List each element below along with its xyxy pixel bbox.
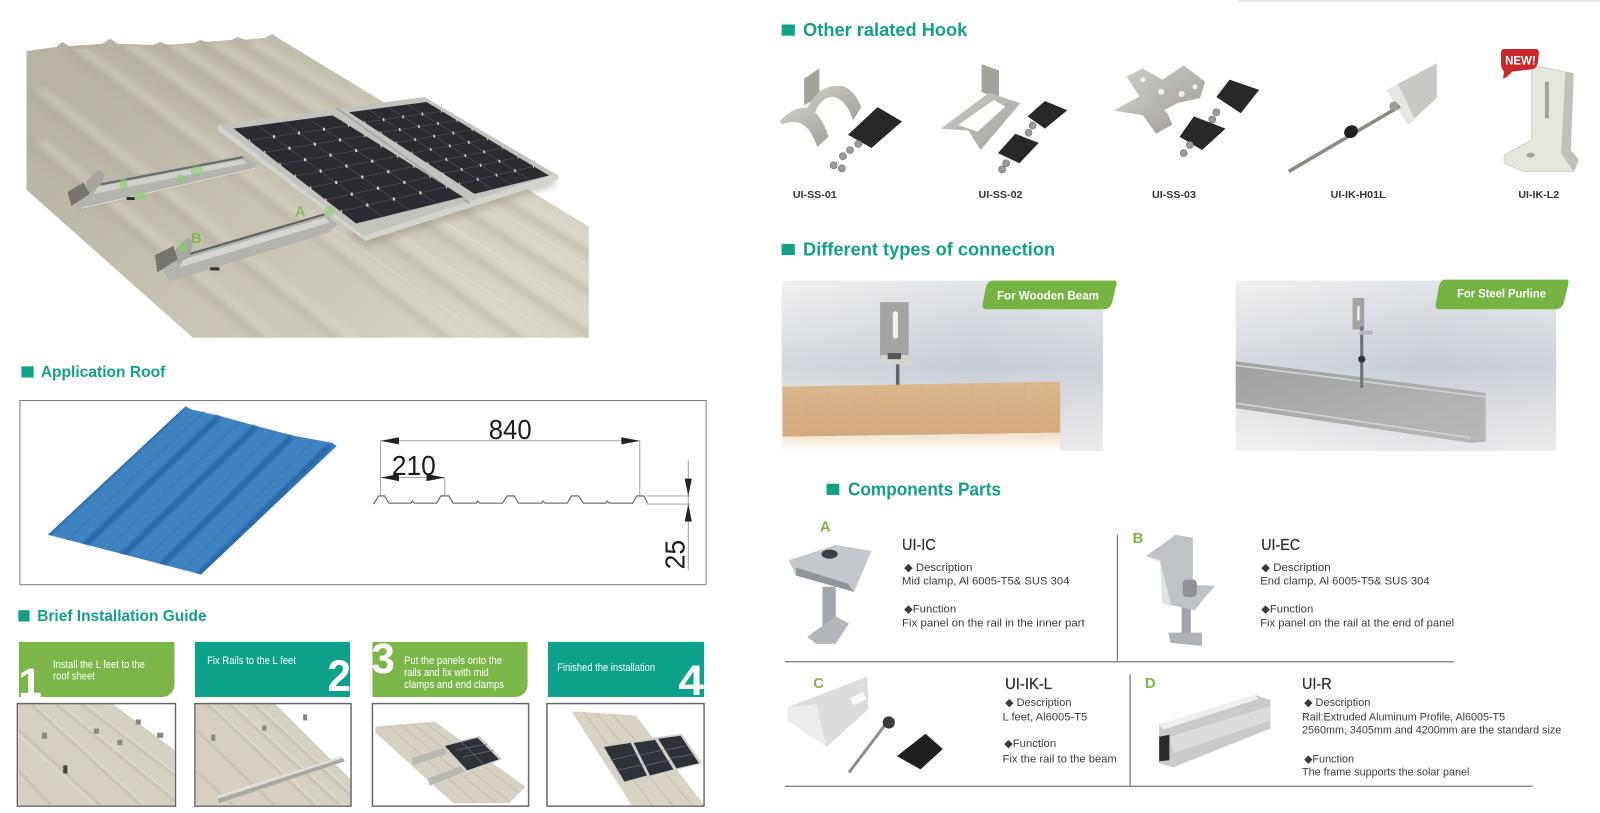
- end clamp illustration: [1146, 535, 1215, 646]
- rail illustration: [1159, 695, 1270, 767]
- component A: UI-IC: ◆Function: [904, 603, 956, 615]
- hook UI-SS-02: [941, 64, 1067, 201]
- module 2 cells: [349, 102, 549, 194]
- component D: UI-R: The frame supports the solar panel: [1302, 767, 1469, 779]
- component C: UI-IK-L: C: [813, 676, 824, 692]
- hook UI-SS-01: [780, 68, 902, 201]
- component C: UI-IK-L: ◆Function: [1004, 738, 1056, 750]
- component B: UI-EC: B: [1133, 531, 1143, 547]
- step 4 photo: [547, 704, 704, 806]
- hook UI-IK-H01L: [1289, 63, 1437, 201]
- part markers: [119, 165, 335, 252]
- label: UI-IK-L2: [1518, 190, 1559, 201]
- heading: Application Roof: Application Roof: [41, 364, 166, 381]
- component D: UI-R: ◆Function: [1304, 753, 1354, 765]
- step 3 banner: Put the panels onto the: [404, 655, 502, 667]
- wooden beam: [783, 382, 1060, 437]
- label: UI-SS-01: [793, 190, 837, 201]
- step 2 banner: Fix Rails to the L feet: [207, 655, 296, 667]
- label: UI-SS-02: [979, 190, 1022, 201]
- blue roof sheet: [45, 406, 337, 577]
- component B: UI-EC: Fix panel on the rail at the end of panel: [1260, 618, 1454, 630]
- step 3 photo: [372, 704, 531, 806]
- step 1 banner: roof sheet: [53, 671, 95, 683]
- step 2 photo: [194, 702, 352, 807]
- steel purline: [1236, 361, 1486, 443]
- tag: for steel purline: For Steel Purline: [1457, 287, 1546, 300]
- faint strip at top right: [1238, 0, 1600, 2]
- step 3 banner: clamps and end clamps: [404, 679, 504, 691]
- component B: UI-EC: ◆ Description: [1261, 562, 1331, 574]
- heading: Components Parts: Components Parts: [848, 478, 1001, 499]
- upper rail: [67, 155, 257, 211]
- tag: for wooden beam: [982, 281, 1117, 309]
- mid clamp illustration: [789, 545, 871, 644]
- part markers: B: [191, 231, 202, 247]
- component C: UI-IK-L: L feet, Al6005-T5: [1003, 711, 1087, 723]
- step 3 banner: [371, 635, 528, 697]
- solar panel array: [218, 97, 558, 241]
- dimension 840: 840: [489, 414, 532, 445]
- component B: UI-EC: UI-EC: [1261, 537, 1300, 554]
- roof profile dimension drawing: [373, 414, 692, 570]
- component D: UI-R: [1145, 676, 1561, 779]
- tag: for steel purline: [1436, 280, 1569, 309]
- component A: UI-IC: A: [820, 520, 831, 536]
- bottom rule: [785, 785, 1533, 787]
- NEW badge: NEW!: [1505, 53, 1536, 67]
- step 2 banner: 2: [328, 650, 351, 701]
- rail on roof: [216, 756, 345, 803]
- component B: UI-EC: ◆Function: [1261, 603, 1313, 615]
- component A: UI-IC: Mid clamp, Al 6005-T5& SUS 304: [902, 576, 1069, 588]
- lower rail: [155, 213, 338, 282]
- divider A/B: [1116, 535, 1118, 661]
- tag: for wooden beam: For Wooden Beam: [997, 290, 1099, 303]
- component C: UI-IK-L: ◆ Description: [1005, 697, 1071, 709]
- heading: Other ralated Hook: Other ralated Hook: [803, 19, 968, 40]
- label: UI-IK-H01L: [1331, 190, 1386, 201]
- hook UI-SS-03: [1114, 65, 1259, 201]
- component B: UI-EC: End clamp, Al 6005-T5& SUS 304: [1260, 576, 1430, 588]
- step 1 banner: 1: [18, 660, 42, 706]
- panel: application roof: [20, 401, 706, 585]
- component A: UI-IC: UI-IC: [902, 537, 936, 554]
- component C: UI-IK-L: UI-IK-L: [1005, 676, 1052, 693]
- component B: UI-EC: [1133, 531, 1454, 646]
- component A: UI-IC: ◆ Description: [904, 562, 972, 574]
- heading: Brief Installation Guide: Brief Installation Guide: [37, 608, 207, 625]
- component D: UI-R: 2560mm, 3405mm and 4200mm are the standard size: [1302, 725, 1561, 737]
- dimension 210: 210: [392, 450, 436, 481]
- part markers: A: [295, 204, 306, 220]
- step 2 banner: [195, 642, 351, 701]
- dimension 25: 25: [660, 540, 691, 569]
- divider C/D: [1129, 675, 1131, 786]
- connection photo: steel purline: [1236, 280, 1569, 451]
- component A: UI-IC: Fix panel on the rail in the inner part: [902, 618, 1085, 630]
- component D: UI-R: UI-R: [1302, 676, 1332, 693]
- component A: UI-IC: [789, 520, 1085, 644]
- roof sheet: [26, 34, 589, 338]
- component D: UI-R: D: [1145, 676, 1156, 692]
- NEW badge: [1501, 49, 1539, 79]
- hook bolt: [1353, 298, 1372, 388]
- component C: UI-IK-L: Fix the rail to the beam: [1003, 753, 1117, 765]
- step 3 banner: rails and fix with mid: [404, 667, 489, 679]
- panel shadow on roof: [347, 163, 558, 247]
- L foot illustration: [788, 677, 943, 772]
- component C: UI-IK-L: [788, 676, 1117, 772]
- step 1 photo: [16, 702, 176, 807]
- hook UI-IK-L2 with NEW badge: [1501, 49, 1579, 201]
- step 1 banner: [18, 642, 174, 706]
- component D: UI-R: ◆ Description: [1304, 697, 1370, 709]
- row divider: [785, 661, 1454, 663]
- step 4 banner: [548, 642, 704, 705]
- component D: UI-R: Rail:Extruded Aluminum Profile, Al6005-T5: [1302, 711, 1505, 723]
- step 1 banner: Install the L feet to the: [53, 659, 145, 671]
- step 4 banner: Finished the installation: [557, 662, 655, 674]
- module 1 cells: [234, 115, 463, 223]
- heading: Different types of connection: Different types of connection: [803, 239, 1055, 260]
- connection photo: wooden beam: [782, 281, 1117, 451]
- L foot on beam: [880, 302, 915, 385]
- hero photo: roof with solar panels: [26, 34, 589, 338]
- label: UI-SS-03: [1152, 190, 1197, 201]
- step 4 banner: 4: [679, 657, 704, 705]
- step 3 banner: 3: [371, 635, 395, 683]
